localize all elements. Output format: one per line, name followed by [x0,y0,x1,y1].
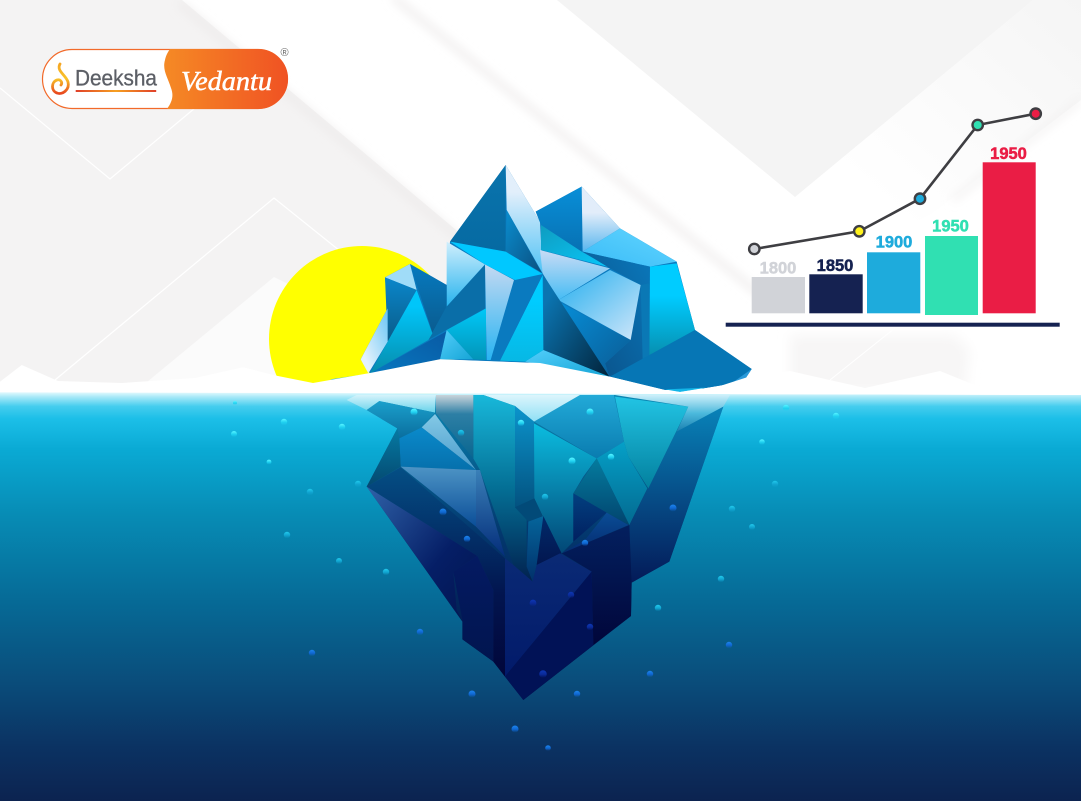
bar 1950 teal [925,218,978,315]
logo [42,47,289,109]
bar 1850 [809,257,863,313]
bar 1900: 1900 [876,234,912,252]
bar 1800 [752,260,805,313]
bar 1950 red [983,145,1036,313]
bar 1850: 1850 [817,257,853,275]
bar 1800: 1800 [760,260,796,278]
iceberg silhouette above water [361,165,752,390]
bubbles: deep [309,504,732,751]
bubbles: mid depth [284,430,778,611]
chart baseline [726,323,1060,327]
iceberg above water [330,165,752,392]
iceberg silhouette below water [367,395,723,700]
logo orange side [164,49,288,109]
bar 1950 red: 1950 [990,145,1027,163]
bubbles: near surface [231,401,839,464]
sun [269,246,455,432]
bar and line chart [726,108,1060,327]
trend line [749,108,1041,254]
registered mark: ® [280,47,289,59]
Deeksha wordmark: Deeksha [75,66,158,91]
Vedantu wordmark: Vedantu [181,66,272,96]
iceberg facet: right arm [629,407,723,583]
submerged iceberg [347,395,730,700]
logo pill white [42,50,288,108]
bar 1950 teal: 1950 [932,218,969,236]
water [0,392,1081,801]
icon: flame [52,64,68,93]
underline [76,90,156,92]
bar 1900 [867,234,920,313]
air bubbles [231,401,839,751]
bubbles: inside dark ice [530,592,593,678]
snow shoreline [0,359,1081,395]
iceberg facet: main peak [450,165,506,252]
background [0,0,1081,400]
